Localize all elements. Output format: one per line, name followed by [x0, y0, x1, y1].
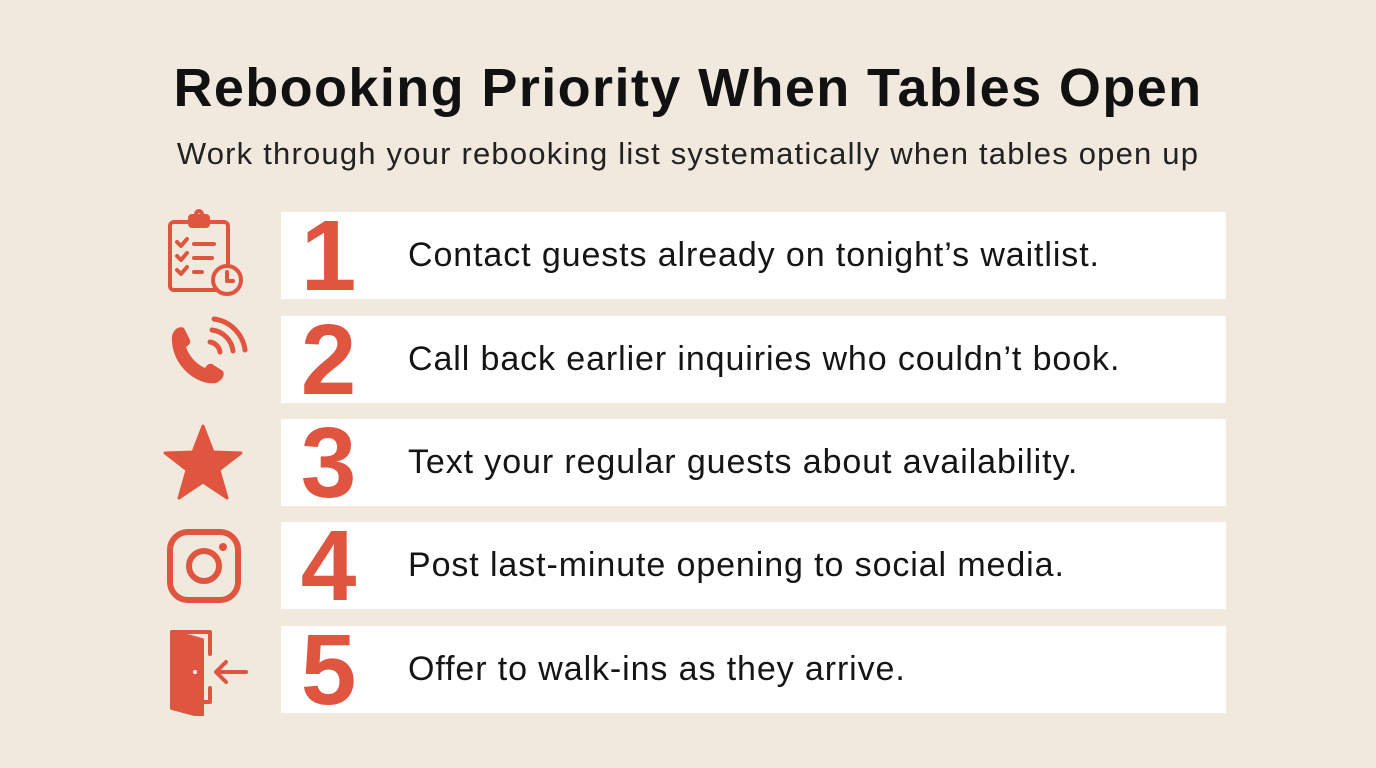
card 1: 1 [301, 200, 356, 312]
card 2: Call back earlier inquiries who couldn’t book. [408, 340, 1120, 378]
card 5: Offer to walk-ins as they arrive. [408, 650, 906, 688]
card 5 [281, 626, 1226, 713]
icon: phone [172, 316, 248, 384]
subtitle: Work through your rebooking list systematically when tables open up [177, 136, 1199, 171]
card 3: 3 [301, 407, 356, 519]
card 2 [281, 316, 1226, 403]
card 3 [281, 419, 1226, 506]
title: Rebooking Priority When Tables Open [173, 58, 1203, 118]
card 1: Contact guests already on tonight’s waitlist. [408, 236, 1100, 274]
card 2: 2 [301, 304, 356, 416]
card 4 [281, 522, 1226, 609]
icon: instagram [167, 529, 241, 603]
card 5: 5 [301, 614, 356, 726]
card 1 [281, 212, 1226, 299]
card 4: Post last-minute opening to social media. [408, 546, 1065, 584]
icon: star [163, 424, 242, 500]
icon: clipboard [168, 209, 243, 296]
card 4: 4 [301, 510, 356, 622]
icon: door with arrow [170, 630, 248, 716]
card 3: Text your regular guests about availability. [408, 443, 1078, 481]
